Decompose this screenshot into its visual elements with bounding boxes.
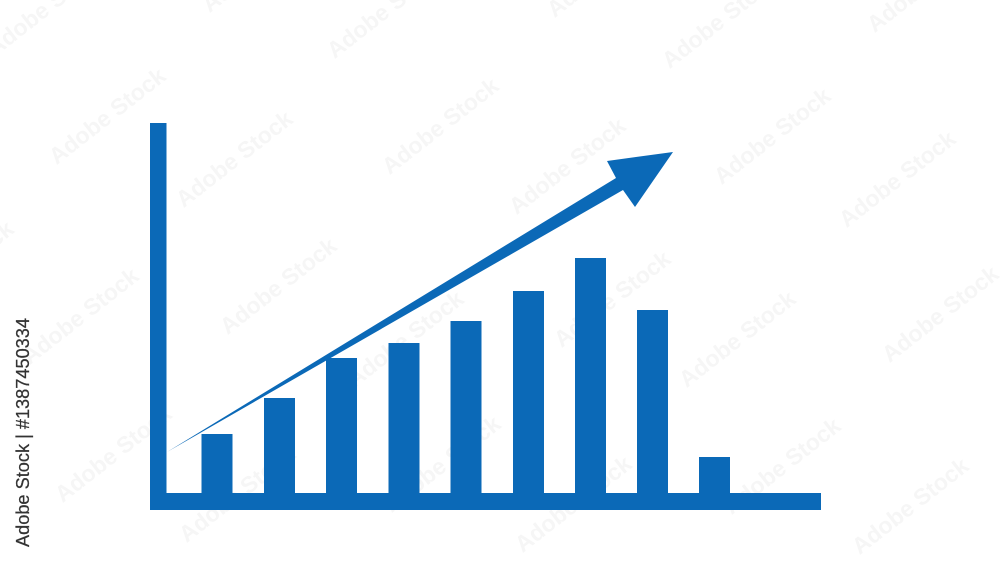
watermarks: Adobe Stock: [877, 260, 1000, 367]
bar 6: [513, 291, 544, 494]
watermarks: Adobe Stock: [709, 82, 836, 189]
watermarks: Adobe Stock: [44, 62, 171, 169]
bar 3: [326, 358, 357, 494]
vertical axis: [150, 123, 166, 510]
bar 5: [450, 321, 482, 494]
watermarks: Adobe Stock: [549, 245, 676, 352]
stock credit text: Adobe Stock | #1387450334: [12, 318, 33, 547]
bar 7: [575, 258, 606, 494]
watermarks: Adobe Stock: [504, 112, 631, 219]
watermarks: Adobe Stock: [215, 232, 342, 339]
watermarks: Adobe Stock: [674, 285, 801, 392]
bar 1: [202, 434, 232, 494]
watermarks: Adobe Stock: [510, 450, 637, 557]
bar 4: [388, 343, 420, 494]
horizontal axis: [150, 493, 821, 510]
watermarks: Adobe Stock: [174, 440, 301, 547]
watermarks: Adobe Stock: [719, 412, 846, 519]
watermarks: Adobe Stock: [377, 72, 504, 179]
watermarks: Adobe Stock: [847, 452, 974, 559]
trend arrow: [167, 152, 673, 452]
watermarks: Adobe Stock: [50, 400, 177, 507]
watermarks: Adobe Stock: [379, 410, 506, 517]
bar chart: [150, 123, 821, 510]
watermarks: Adobe Stock: [171, 105, 298, 212]
bar 2: [264, 398, 295, 494]
watermarks: Adobe Stock: [342, 285, 469, 392]
bar 9: [699, 457, 730, 494]
watermarks: Adobe Stock: [17, 262, 144, 369]
bar 8: [637, 310, 668, 494]
watermarks: Adobe Stock: [834, 125, 961, 232]
